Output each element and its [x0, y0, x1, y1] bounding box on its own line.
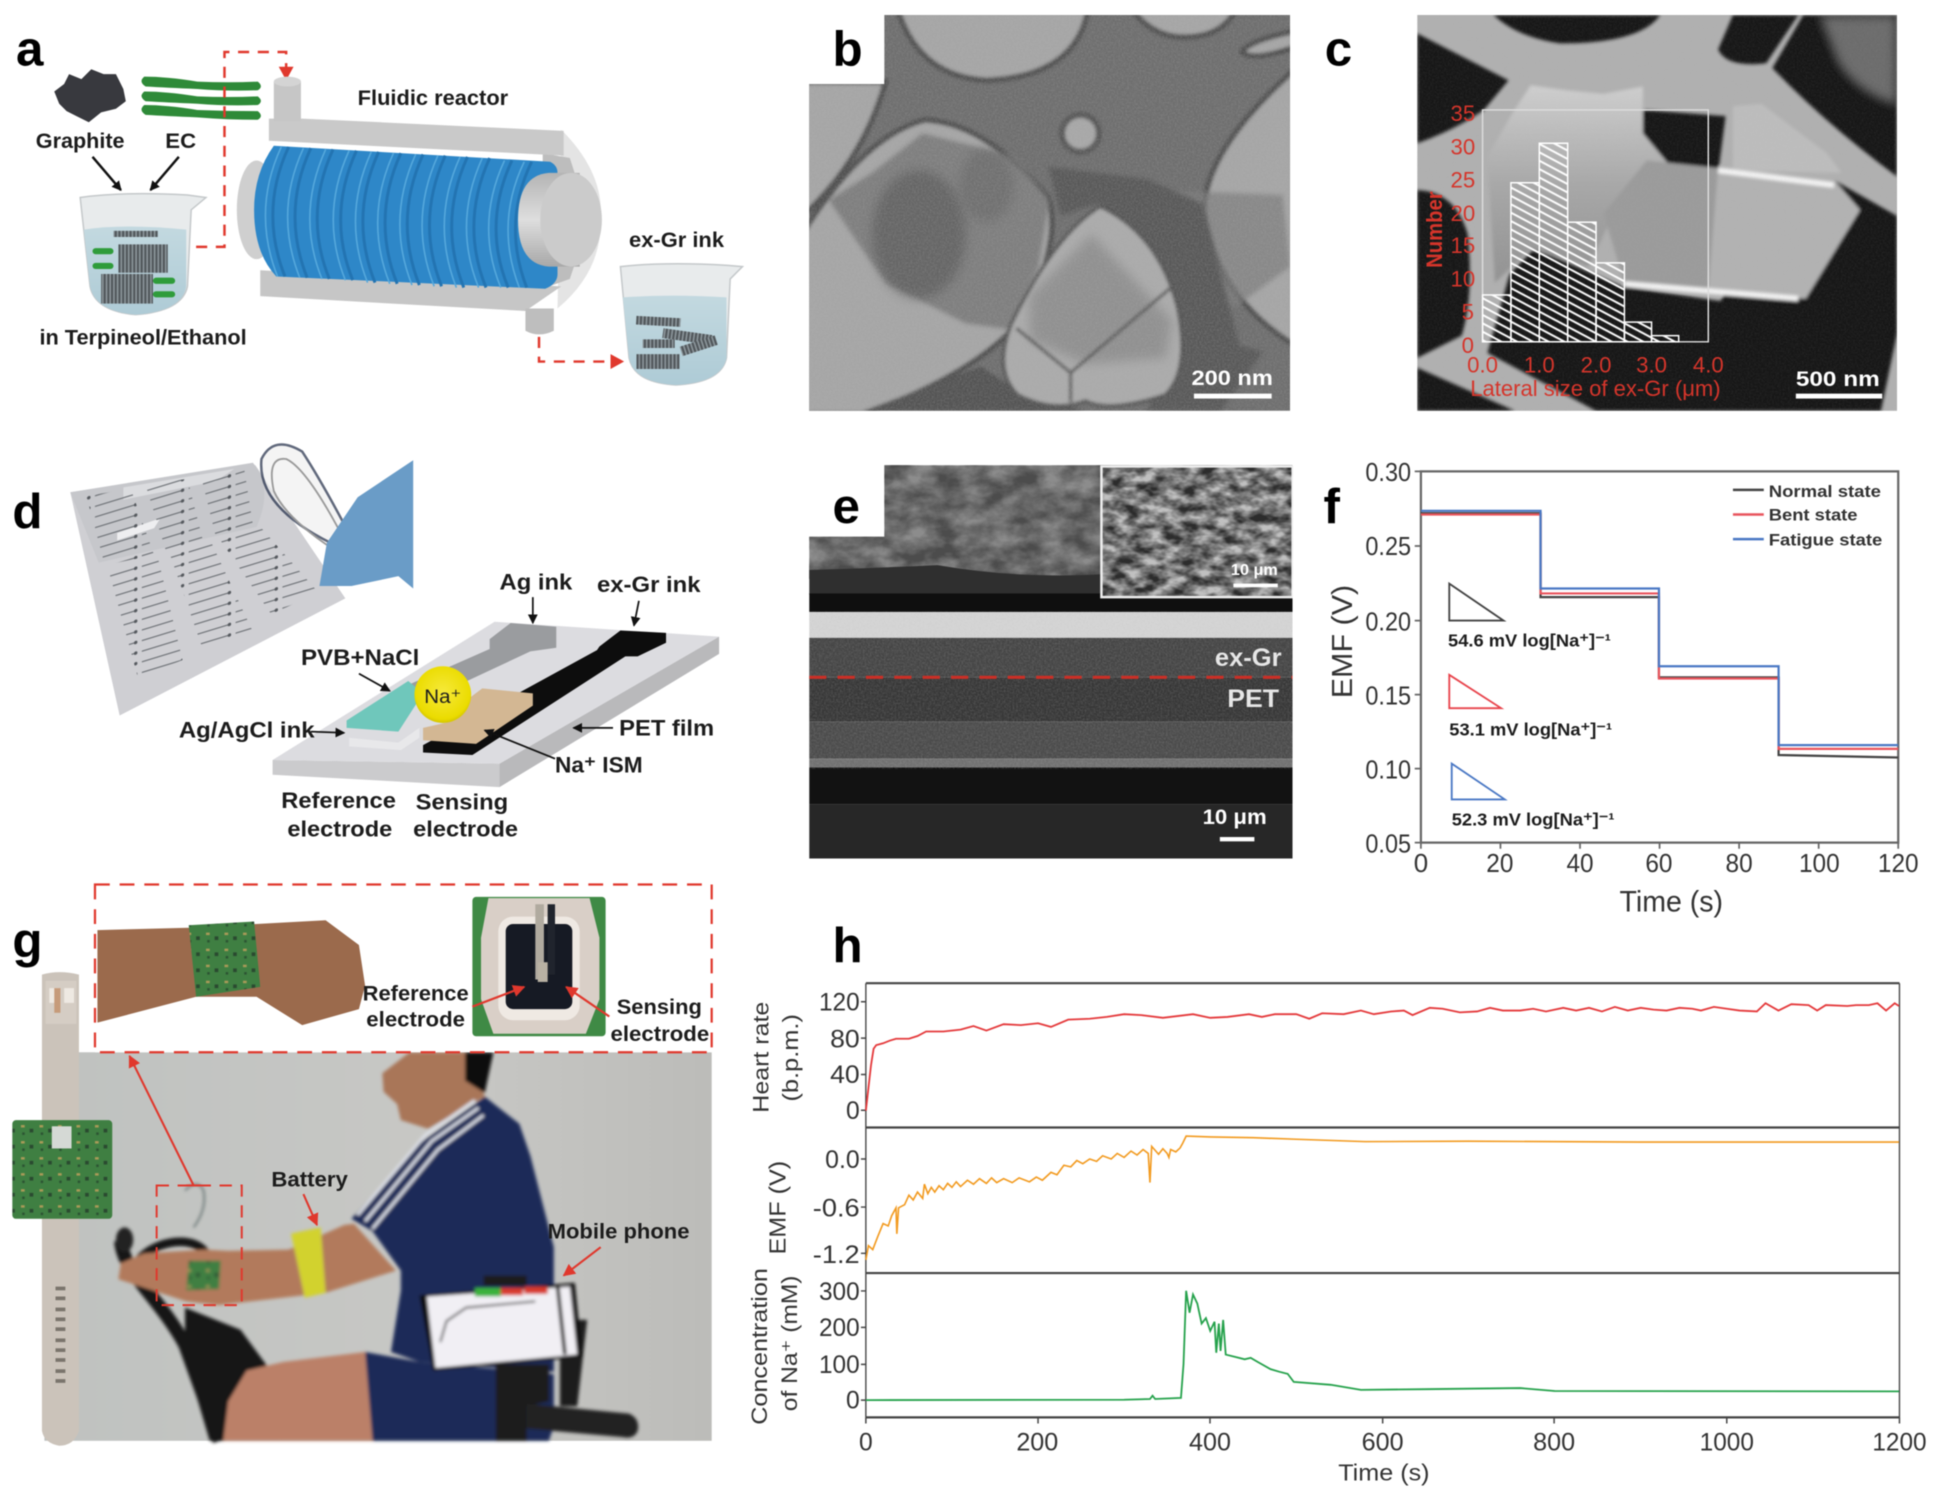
- EMF ticks: [813, 1147, 860, 1269]
- legend: Normal state: [1769, 482, 1881, 501]
- x axis ticks: 20: [1486, 850, 1513, 878]
- scale bar: 10 μm: [1203, 804, 1267, 841]
- y axis ticks: 0.25: [1365, 533, 1411, 561]
- sodium concentration trace: [866, 1291, 1899, 1400]
- panel h: real-time traces: [747, 918, 1927, 1485]
- heart rate ticks: 120: [819, 989, 860, 1016]
- label: Ag/AgCl ink: Ag/AgCl ink: [179, 718, 315, 743]
- arrow: dashed flow to reactor inlet: [196, 52, 294, 247]
- panel label h: h: [833, 918, 863, 973]
- panel label e: e: [833, 479, 860, 534]
- y axis ticks: 0.30: [1365, 459, 1411, 487]
- y axis ticks: 0.15: [1365, 682, 1411, 710]
- label: EC: EC: [165, 128, 196, 153]
- callout arrows: [311, 597, 639, 759]
- x axis ticks: 60: [1645, 850, 1673, 878]
- concentration ticks: 0: [846, 1388, 860, 1415]
- label: Mobile phone: Mobile phone: [548, 1219, 689, 1244]
- fluidic reactor: [237, 77, 602, 334]
- x axis ticks: 120: [1878, 850, 1919, 878]
- x axis ticks: 800: [1533, 1430, 1575, 1457]
- legend: [1733, 482, 1882, 549]
- scale bar: 500 nm: [1796, 366, 1882, 399]
- concentration ticks: 100: [819, 1352, 860, 1379]
- label: Sensing electrode: Sensing: [617, 994, 702, 1019]
- histogram inset: 20: [1450, 201, 1475, 226]
- histogram inset: 35: [1450, 101, 1475, 126]
- heart rate ticks: [819, 989, 860, 1125]
- small dashed selection box: [157, 1185, 242, 1305]
- x axis ticks: 600: [1362, 1430, 1404, 1457]
- sensor device schematic: [273, 622, 719, 787]
- EMF ticks: 0.0: [825, 1147, 860, 1174]
- label: Reference electrode: [363, 980, 469, 1031]
- arrow: selection to inset: [130, 1056, 201, 1185]
- arrow: mobile phone: [564, 1247, 601, 1276]
- x axis ticks: 400: [1189, 1430, 1231, 1457]
- icon: beaker with ex-Gr ink: [620, 264, 743, 385]
- panel a: fluidic reactor schematic: [16, 22, 743, 385]
- watch strap with sensor board: [12, 972, 112, 1446]
- panel label d: d: [12, 484, 42, 539]
- panel d: printed sensor device: [12, 444, 719, 841]
- y axis ticks: [1365, 459, 1411, 858]
- slope triangle: normal: 54.6 mV log[Na⁺]⁻¹: [1448, 630, 1611, 650]
- label: Battery: Battery: [271, 1167, 348, 1192]
- axis title: Concentration of Na+ (mM): [747, 1268, 802, 1425]
- slope triangle: fatigue: [1452, 764, 1615, 829]
- histogram inset: 4.0: [1693, 353, 1724, 378]
- axis title: Concentration of Na+ (mM): of Na⁺ (mM): [777, 1276, 802, 1411]
- EMF trace: [866, 1136, 1899, 1260]
- legend: Bent state: [1769, 506, 1858, 525]
- axis title: EMF (V): EMF (V): [765, 1161, 791, 1255]
- inset micrograph: [1101, 466, 1293, 597]
- arrows into beaker: [93, 157, 179, 190]
- axis title: Heart rate (b.p.m.): [748, 1002, 803, 1113]
- histogram inset: 2.0: [1581, 353, 1611, 378]
- arrows to electrodes: [472, 987, 609, 1017]
- x axis ticks: 1200: [1872, 1430, 1927, 1457]
- label: Graphite: Graphite: [36, 128, 125, 153]
- icon: graphite powder: [54, 69, 126, 122]
- sensor strip loop: [261, 444, 354, 543]
- scale bar: 200 nm: 200 nm: [1191, 365, 1273, 390]
- label: PET film: PET film: [619, 715, 714, 740]
- heart rate ticks: 0: [846, 1098, 860, 1125]
- label: ex-Gr ink: ex-Gr ink: [597, 572, 701, 597]
- histogram inset: 3.0: [1636, 353, 1667, 378]
- label: Sensing electrode: electrode: [611, 1021, 709, 1046]
- panel label b: b: [833, 22, 863, 77]
- slope triangle: bent: 53.1 mV log[Na⁺]⁻¹: [1449, 719, 1612, 739]
- x axis ticks: 100: [1799, 850, 1840, 878]
- scale bar: 500 nm: 500 nm: [1796, 366, 1880, 391]
- label: Na+: Na⁺: [424, 686, 461, 708]
- histogram inset: 0: [1462, 333, 1474, 358]
- histogram inset: Number: [1422, 191, 1447, 268]
- panel label g: g: [12, 913, 42, 968]
- y axis ticks: 0.10: [1365, 756, 1411, 784]
- panel c: SEM image with histogram: [1325, 15, 1897, 411]
- histogram inset: 30: [1450, 134, 1475, 159]
- slope triangle: bent: [1449, 675, 1612, 739]
- label: Na+ ISM: Na⁺ ISM: [555, 752, 643, 777]
- label: Reference electrode: electrode: [366, 1006, 465, 1031]
- phone on mount: [419, 1276, 582, 1370]
- x axis ticks: 40: [1566, 850, 1594, 878]
- inset: electrode housing: [472, 897, 606, 1036]
- icon: beaker with graphite and EC: [80, 194, 206, 315]
- concentration ticks: 300: [819, 1279, 860, 1306]
- label: Reference electrode: [281, 788, 396, 841]
- histogram inset: 10: [1450, 266, 1475, 291]
- x axis ticks: 1000: [1700, 1430, 1754, 1457]
- panel g: wearable photo: [12, 885, 712, 1446]
- histogram inset: 15: [1450, 233, 1475, 258]
- label: PET: PET: [1227, 686, 1279, 713]
- histogram inset: 1.0: [1524, 353, 1555, 378]
- x axis ticks: 0: [1414, 850, 1428, 878]
- legend: Fatigue state: [1769, 530, 1882, 549]
- heart rate ticks: 40: [830, 1062, 860, 1089]
- panel b: TEM image: [802, 10, 1295, 415]
- chart frame: [1415, 471, 1898, 849]
- photo background: [44, 1052, 712, 1441]
- panel e: cross-section SEM: [809, 465, 1293, 859]
- TEM micrograph: [802, 10, 1295, 415]
- label: Ag ink: Ag ink: [500, 570, 573, 595]
- label: ex-Gr ink: ex-Gr ink: [629, 227, 725, 252]
- axis title: EMF (V): EMF (V): [1327, 585, 1359, 698]
- concentration ticks: 200: [819, 1315, 860, 1342]
- histogram inset: 0.0: [1467, 353, 1498, 378]
- label: Sensing electrode: [413, 789, 518, 841]
- scale bar: inset 10 μm: [1231, 561, 1278, 587]
- x axis ticks: 0: [859, 1430, 873, 1457]
- icon: EC polymer strands: [142, 77, 261, 120]
- x axis ticks: 80: [1726, 850, 1753, 878]
- person on exercise bike: [116, 1052, 638, 1441]
- inset white box background: [95, 885, 712, 1052]
- histogram inset: Lateral size of ex-Gr (μm): [1470, 376, 1721, 401]
- slope triangle: fatigue: 52.3 mV log[Na⁺]⁻¹: [1452, 809, 1615, 829]
- histogram inset: 25: [1450, 168, 1475, 193]
- y axis ticks: 0.20: [1365, 608, 1411, 636]
- x axis ticks: 200: [1016, 1430, 1058, 1457]
- axis title: Time (s): Time (s): [1338, 1459, 1430, 1485]
- axis title: Heart rate (b.p.m.): (b.p.m.): [778, 1014, 803, 1102]
- scale bar: 10 μm: 10 μm: [1203, 804, 1267, 829]
- heart rate ticks: 80: [830, 1026, 860, 1053]
- label: Sensing electrode: Sensing: [416, 789, 508, 814]
- histogram inset: [1422, 101, 1724, 401]
- slope triangle: normal: [1448, 584, 1611, 650]
- x axis ticks: [1414, 850, 1919, 878]
- panel label f: f: [1323, 479, 1340, 534]
- scale bar: 200 nm: [1191, 365, 1273, 399]
- axis title: Concentration of Na+ (mM): Concentration: [747, 1268, 772, 1425]
- arrow: battery: [303, 1194, 317, 1225]
- dashed inset frame: [95, 885, 712, 1052]
- label: ex-Gr: ex-Gr: [1215, 645, 1282, 672]
- label: in Terpineol/Ethanol: in Terpineol/Ethanol: [39, 326, 247, 349]
- label: Sensing electrode: electrode: [413, 816, 518, 841]
- phone mount and seat post: [496, 1364, 549, 1441]
- label: Reference electrode: electrode: [287, 816, 392, 841]
- concentration ticks: [819, 1279, 860, 1415]
- yellow battery band: [291, 1227, 326, 1298]
- wrist sensor board: [186, 1261, 221, 1290]
- SEM micrograph: [1417, 15, 1897, 411]
- label: Reference electrode: Reference: [281, 788, 396, 813]
- label: Reference electrode: Reference: [363, 980, 469, 1005]
- blue coil: [254, 146, 558, 289]
- panel label c: c: [1325, 22, 1352, 77]
- arrow: dashed flow to ink: [539, 337, 624, 369]
- x axis ticks: [859, 1430, 1927, 1457]
- label: Sensing electrode: [611, 994, 709, 1046]
- axis title: Time (s): Time (s): [1619, 886, 1723, 919]
- panel label a: a: [16, 22, 44, 77]
- heart rate trace: [866, 1003, 1899, 1111]
- panel f: EMF step chart: [1323, 459, 1919, 919]
- histogram inset: 5: [1462, 300, 1474, 325]
- chart frames: [861, 983, 1899, 1424]
- inset: wrist with sensor: [97, 920, 365, 1025]
- scale bar: inset 10 μm: 10 μm: [1231, 561, 1278, 579]
- label: Fluidic reactor: Fluidic reactor: [358, 85, 509, 110]
- Na+ ion: [414, 666, 471, 723]
- blue glove: [319, 460, 413, 589]
- y axis ticks: 0.05: [1365, 830, 1411, 858]
- EMF ticks: -1.2: [813, 1242, 860, 1269]
- cross-section micrograph: [809, 465, 1293, 859]
- photo: printed electrode roll: [70, 444, 413, 716]
- label: PVB+NaCl: PVB+NaCl: [301, 645, 419, 670]
- EMF ticks: -0.6: [813, 1195, 860, 1222]
- axis title: Heart rate (b.p.m.): Heart rate: [748, 1002, 773, 1113]
- step curves: [1421, 511, 1898, 757]
